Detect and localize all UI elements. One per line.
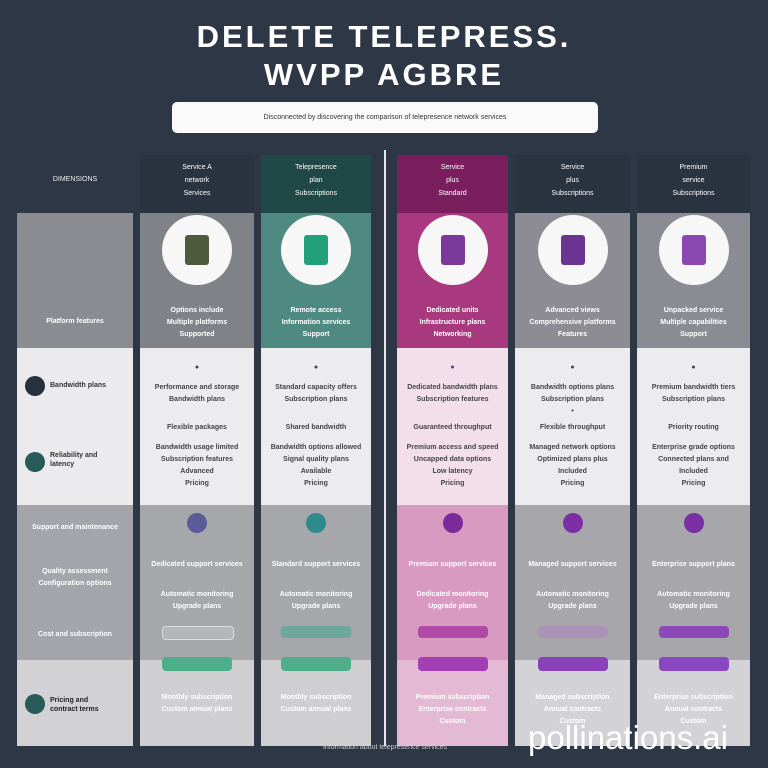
row D: Pricing and: [50, 697, 88, 704]
row C: Enterprise support plans: [652, 561, 735, 568]
footer note: Information about telepresence services: [323, 744, 447, 751]
row B: Subscription plans: [541, 396, 604, 403]
row B: Priority routing: [668, 424, 719, 431]
row A: icons: Multiple platforms: [167, 319, 227, 326]
row C: Support and maintenance: [32, 524, 118, 531]
row C: Upgrade plans: [292, 603, 340, 610]
row B: Subscription features: [161, 456, 233, 463]
row C: Upgrade plans: [428, 603, 477, 610]
row D: Custom: [439, 718, 466, 725]
header row: Premium: [679, 164, 708, 171]
watermark: pollinations.ai: [528, 719, 728, 756]
row B: Guaranteed throughput: [413, 424, 492, 431]
row B: Bandwidth plans: [50, 382, 106, 389]
row C: Standard support services: [272, 561, 360, 568]
row B: Premium access and speed: [407, 444, 498, 451]
row B: Pricing: [185, 480, 209, 487]
row A: icons: Information services: [282, 319, 350, 326]
row B: ●: [691, 364, 696, 371]
row B: Available: [301, 468, 331, 475]
row A: icons: Platform features: [46, 318, 104, 325]
row B: Flexible packages: [167, 424, 227, 431]
row C: Automatic monitoring: [536, 591, 609, 598]
row A: icons: Unpacked service: [664, 307, 723, 314]
row B: ●: [450, 364, 455, 371]
row D: contract terms: [50, 706, 99, 713]
header row: Standard: [438, 190, 467, 197]
header row: Service: [441, 164, 464, 171]
row A: icons: Support: [303, 331, 329, 338]
row A: icons: Remote access: [290, 307, 341, 314]
row C: Dedicated support services: [151, 561, 243, 568]
row B: Advanced: [180, 468, 214, 475]
row A: icons: Infrastructure plans: [420, 319, 485, 326]
row B: Signal quality plans: [283, 456, 349, 463]
row D: Custom annual plans: [162, 706, 232, 713]
row B: Bandwidth options plans: [531, 384, 614, 391]
row D: [17, 657, 750, 746]
row D: Monthly subscription: [281, 694, 351, 701]
row B: ●: [195, 364, 199, 371]
row B: Connected plans and: [658, 456, 729, 463]
header row: plan: [309, 177, 323, 184]
row A: icons: [17, 213, 750, 348]
row B: Dedicated bandwidth plans: [407, 384, 498, 391]
row A: icons: Comprehensive platforms: [529, 319, 616, 326]
row D: Enterprise subscription: [654, 694, 733, 701]
row C: Upgrade plans: [669, 603, 718, 610]
row C: Automatic monitoring: [280, 591, 352, 598]
row B: Premium bandwidth tiers: [652, 384, 735, 391]
row C: Configuration options: [38, 580, 112, 587]
header row: Telepresence: [295, 164, 337, 171]
header row: DIMENSIONS: [53, 176, 97, 183]
row B: Pricing: [304, 480, 328, 487]
row B: ●: [314, 364, 318, 371]
row D: Custom annual plans: [281, 706, 351, 713]
title: DELETE TELEPRESS.: [197, 19, 571, 54]
header row: Service A: [182, 164, 212, 171]
row C: Dedicated monitoring: [417, 591, 488, 598]
row D: Monthly subscription: [162, 694, 232, 701]
row B: Uncapped data options: [414, 456, 491, 463]
row B: Pricing: [561, 480, 584, 487]
row B: Managed network options: [529, 444, 616, 451]
row C: Premium support services: [409, 561, 496, 568]
row B: Included: [679, 468, 708, 475]
row A: icons: Networking: [433, 331, 472, 338]
row C: [17, 505, 750, 660]
header row: plus: [566, 177, 579, 184]
row B: ●: [570, 364, 575, 371]
header row: [53, 155, 715, 213]
row B: Enterprise grade options: [652, 444, 735, 451]
row A: icons: Advanced views: [545, 307, 600, 314]
row B: Reliability and: [50, 452, 97, 459]
row D: Annual contracts: [665, 706, 722, 713]
header row: Service: [561, 164, 584, 171]
row C: Upgrade plans: [173, 603, 221, 610]
row B: Subscription plans: [284, 396, 348, 403]
row C: Automatic monitoring: [657, 591, 730, 598]
header row: plus: [446, 177, 459, 184]
row B: Low latency: [432, 468, 473, 475]
row C: Managed support services: [528, 561, 617, 568]
header row: Subscriptions: [672, 190, 715, 197]
row A: icons: Options include: [171, 307, 223, 314]
row C: Quality assessment: [42, 568, 108, 575]
title: WVPP AGBRE: [264, 57, 504, 92]
search bar: Disconnected by discovering the comparison of telepresence network services: [264, 114, 506, 121]
row B: Bandwidth plans: [169, 396, 225, 403]
row A: icons: Features: [558, 331, 587, 338]
search bar: [172, 102, 598, 133]
header row: network: [185, 177, 209, 184]
title: [197, 19, 571, 92]
row A: icons: Support: [680, 331, 707, 338]
row A: icons: Multiple capabilities: [660, 319, 727, 326]
row B: Performance and storage: [155, 384, 239, 391]
row B: Standard capacity offers: [275, 384, 357, 391]
header row: Subscriptions: [295, 190, 337, 197]
row B: •: [571, 408, 574, 415]
row C: Upgrade plans: [548, 603, 597, 610]
header row: Subscriptions: [551, 190, 594, 197]
row A: icons: Dedicated units: [426, 307, 479, 314]
row B: Subscription plans: [662, 396, 725, 403]
row B: Flexible throughput: [540, 424, 605, 431]
header row: service: [682, 177, 705, 184]
row C: Automatic monitoring: [161, 591, 233, 598]
row B: Pricing: [682, 480, 705, 487]
divider line: [384, 150, 386, 746]
row D: Premium subscription: [416, 694, 489, 701]
row B: Bandwidth usage limited: [156, 444, 238, 451]
row B: Included: [558, 468, 587, 475]
row B: [17, 348, 750, 505]
row D: Enterprise contracts: [418, 706, 487, 713]
row B: Bandwidth options allowed: [271, 444, 361, 451]
row D: Custom: [680, 718, 707, 725]
row B: Pricing: [441, 480, 464, 487]
row B: Subscription features: [417, 396, 488, 403]
row B: Shared bandwidth: [286, 424, 346, 431]
row D: Custom: [559, 718, 586, 725]
row B: Optimized plans plus: [537, 456, 608, 463]
row D: Managed subscription: [535, 694, 610, 701]
row C: Cost and subscription: [38, 631, 112, 638]
row B: latency: [50, 461, 74, 468]
row A: icons: Supported: [180, 331, 214, 338]
row D: Annual contracts: [544, 706, 601, 713]
header row: Services: [184, 190, 210, 197]
